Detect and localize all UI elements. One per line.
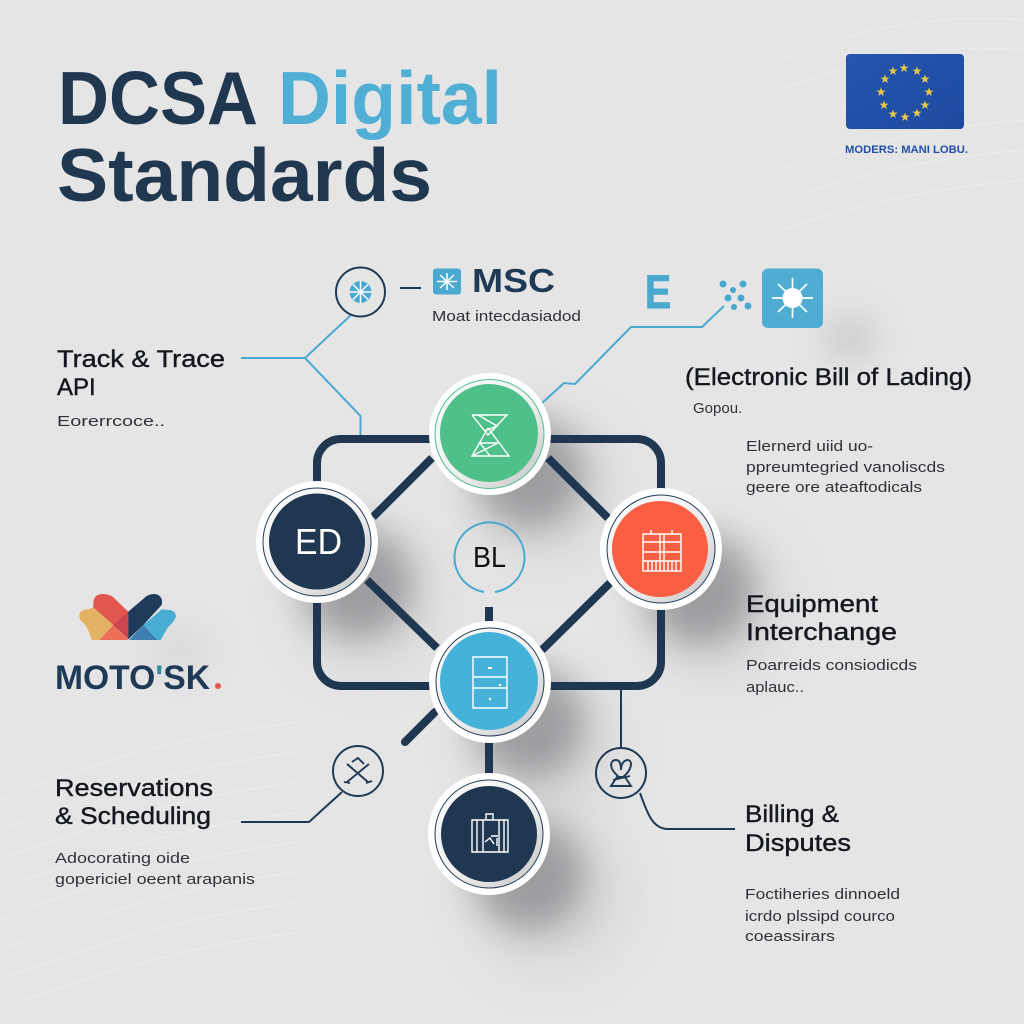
text: Reservations and Scheduling: Reservations	[55, 775, 213, 802]
connector: Billing	[621, 688, 735, 829]
MSC group	[336, 262, 581, 325]
text: Billing and Disputes: coeassirars	[745, 928, 835, 945]
flag: ★	[888, 64, 898, 78]
title: Digital	[278, 56, 502, 140]
text: Electronic Bill of Lading: (Electronic Bill of Lading)	[685, 364, 972, 391]
flag: ★	[880, 72, 890, 86]
text: Track and Trace API: Track & Trace	[57, 346, 225, 373]
text: Track and Trace API: API	[57, 374, 96, 401]
node: ED navy: ED	[295, 521, 342, 562]
connector: green node to sun icon	[541, 306, 724, 404]
text: Billing and Disputes: Disputes	[745, 830, 851, 857]
flag: ★	[899, 61, 909, 75]
node: dark	[428, 773, 550, 895]
logo wordmark: MOTO'SK	[55, 659, 210, 697]
text: Electronic Bill of Lading: Elernerd uiid uo-	[746, 438, 873, 455]
flag: ★	[876, 85, 886, 99]
text: Equipment Interchange: aplauc..	[746, 679, 804, 696]
text: Billing and Disputes: Foctiheries dinnoeld	[745, 886, 900, 903]
title	[57, 56, 502, 217]
flag: ★	[912, 64, 922, 78]
flag: ★	[920, 98, 930, 112]
connector: Reservations	[241, 792, 342, 822]
text: Electronic Bill of Lading: geere ore ateaftodicals	[746, 479, 922, 496]
icon: dot cluster	[720, 280, 752, 310]
text: Electronic Bill of Lading	[685, 364, 972, 496]
flag: ★	[888, 107, 898, 121]
flag	[846, 54, 964, 129]
text: Equipment Interchange: Poarreids consiodicds	[746, 657, 917, 674]
icon: balloon knot	[596, 748, 646, 798]
text: Billing and Disputes: Billing &	[745, 801, 839, 828]
flag: ★	[924, 85, 934, 99]
text: Track and Trace API: Eorerrcoce..	[57, 413, 165, 430]
flag: ★	[879, 98, 889, 112]
node: ED navy	[256, 481, 378, 603]
flag: ★	[920, 72, 930, 86]
text: Equipment Interchange	[746, 591, 917, 696]
flag caption: MODERS: MANI LOBU.	[845, 144, 968, 156]
icon: container grid	[643, 530, 681, 571]
text: Reservations and Scheduling: gopericiel oeent arapanis	[55, 871, 255, 888]
MSC wordmark: MSC	[472, 262, 555, 299]
title: Standards	[57, 133, 432, 217]
text: Billing and Disputes	[745, 801, 900, 945]
node: blue	[429, 621, 551, 743]
icon: cargo case	[472, 814, 508, 852]
text: Reservations and Scheduling	[55, 775, 255, 888]
flag: ★	[900, 110, 910, 124]
letter E: E	[645, 265, 671, 318]
EU flag badge	[845, 54, 968, 156]
icon: crossed tools	[333, 746, 383, 796]
connector: Track and Trace	[241, 315, 360, 438]
text: Electronic Bill of Lading: ppreumtegried vanoliscds	[746, 459, 945, 476]
network frame	[317, 439, 661, 778]
text: Electronic Bill of Lading: Gopou.	[693, 400, 742, 417]
icon: snowflake circle	[336, 268, 385, 316]
text: Track and Trace API	[57, 346, 225, 430]
MSC subtitle: Moat intecdasiadod	[432, 308, 581, 325]
text: Reservations and Scheduling: Adocorating oide	[55, 850, 190, 867]
central BL badge	[455, 522, 524, 592]
text: Equipment Interchange: Interchange	[746, 619, 897, 646]
node: green	[429, 373, 551, 495]
text: Reservations and Scheduling: & Scheduling	[55, 803, 211, 830]
central BL badge: BL	[473, 542, 506, 574]
icon: MSC square	[433, 268, 461, 294]
icon: sun tile	[762, 268, 823, 328]
text: Equipment Interchange: Equipment	[746, 591, 878, 618]
title: DCSA	[58, 56, 258, 140]
logo mark	[79, 594, 176, 640]
icon: green node symbol	[472, 415, 509, 456]
logo: Motosk	[55, 594, 221, 697]
icon: cabinet	[473, 657, 507, 708]
flag: ★	[912, 106, 922, 120]
text: Billing and Disputes: icrdo plssipd courco	[745, 908, 895, 925]
node: red	[600, 488, 722, 610]
